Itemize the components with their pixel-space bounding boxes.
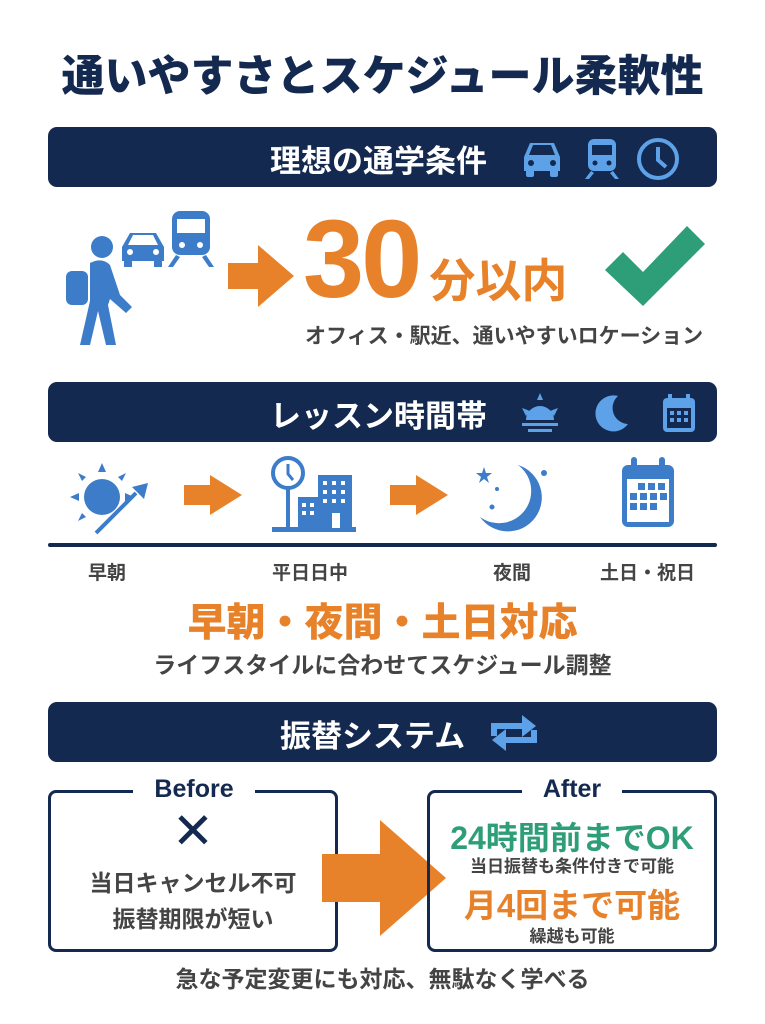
banner: transfer system (48, 702, 717, 762)
text: 当日キャンセル不可 (90, 870, 296, 896)
arrow (390, 475, 448, 515)
icons: car train clock (524, 138, 679, 180)
icon: building clock (272, 458, 356, 532)
timeline labels: 平日日中 (272, 563, 348, 584)
arrow: orange right (228, 245, 294, 307)
panel: before (48, 790, 338, 952)
icon: X: ✕ (172, 802, 214, 860)
timeline labels: 早朝 (88, 563, 126, 584)
text: 当日振替も条件付きで可能 (470, 857, 674, 876)
icon: sunrise (70, 463, 148, 533)
icon: walker with car and train (66, 211, 214, 345)
highlight: early/night/weekend: 早朝・夜間・土日対応 (187, 602, 578, 645)
text: 振替期限が短い (112, 906, 274, 932)
subtitle: lifestyle: ライフスタイルに合わせてスケジュール調整 (153, 652, 612, 678)
icons: sunrise moon calendar (522, 393, 695, 432)
timeline labels (88, 562, 695, 584)
banner title: レッスン時間帯 (270, 399, 487, 434)
icon: green check (605, 226, 705, 306)
label: After: After (543, 775, 601, 803)
banner: lesson hours (48, 382, 717, 442)
green headline: 24時間前までOK (450, 820, 694, 856)
label: Before (133, 775, 255, 804)
footer text: 急な予定変更にも対応、無駄なく学べる (176, 966, 590, 992)
orange headline: 月4回まで可能 (464, 887, 680, 924)
panel: after (427, 790, 717, 952)
timeline icons (70, 456, 674, 534)
big number: 30分以内: 30分以内 (303, 198, 567, 321)
icon: calendar (622, 457, 674, 527)
banner title: 理想の通学条件 (270, 144, 487, 179)
icon: swap arrows (491, 715, 537, 751)
text (90, 870, 296, 932)
label: Before: Before (154, 775, 234, 803)
banner: ideal commute (48, 127, 717, 187)
title: 通いやすさとスケジュール柔軟性 (62, 53, 704, 101)
icon: moon stars (476, 465, 547, 531)
arrow: big orange (322, 820, 446, 936)
text: 繰越も可能 (530, 927, 614, 946)
label: After (522, 775, 622, 804)
timeline labels: 夜間 (493, 563, 531, 584)
arrow (184, 475, 242, 515)
timeline labels: 土日・祝日 (600, 563, 695, 584)
banner title: 振替システム (280, 719, 465, 754)
subtitle: location: オフィス・駅近、通いやすいロケーション (305, 325, 703, 348)
